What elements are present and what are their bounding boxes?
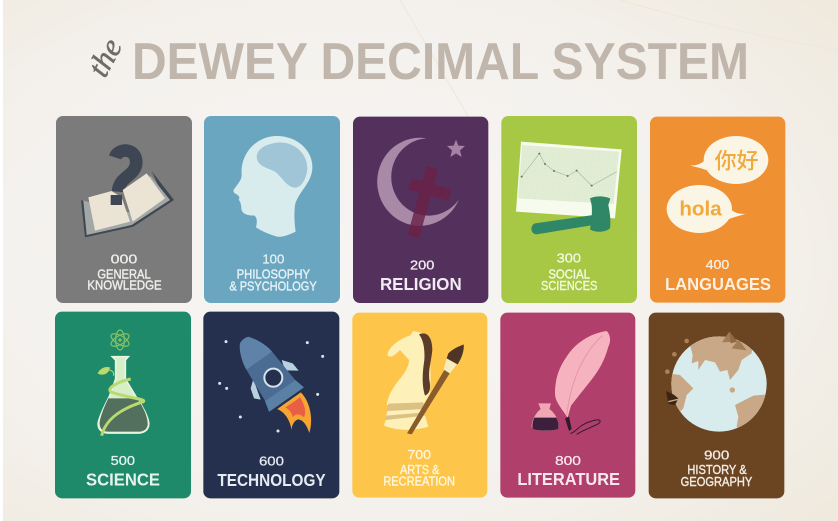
icon: chess knight and paintbrush [384, 331, 464, 434]
label: 500 science: SCIENCE [86, 470, 160, 490]
icon: head with brain [233, 136, 312, 237]
label: 000 general knowledge: 000 [111, 251, 137, 266]
icon: open book and question mark [81, 151, 174, 237]
label: 500 science [86, 453, 160, 490]
card: 500 science [55, 312, 191, 498]
icon: quill and inkwell [532, 331, 610, 434]
label: 600 technology: 600 [259, 454, 284, 469]
label: 100 philosophy and psychology: 100 [262, 251, 284, 266]
label: 300 social sciences [541, 251, 597, 293]
label: 100 philosophy and psychology: PHILOSOPHY [237, 268, 310, 282]
card: 200 religion [353, 117, 488, 303]
icon: flask with atom and vine [98, 330, 149, 436]
label: 900 history and geography [681, 447, 753, 489]
card: 100 philosophy and psychology [204, 116, 340, 303]
icon: speech bubble nihao [690, 136, 768, 184]
label: 200 religion: 200 [410, 257, 434, 272]
label: 100 philosophy and psychology: & PSYCHOLOGY [229, 279, 317, 293]
label: 000 general knowledge: GENERAL [97, 267, 151, 281]
card: 000 general knowledge [56, 116, 192, 303]
icon: speech bubble hola [667, 185, 746, 233]
label: 900 history and geography: 900 [704, 447, 729, 462]
label: 800 literature: 800 [555, 453, 581, 468]
label: 300 social sciences: SCIENCES [541, 279, 597, 293]
icon: speech bubble nihao: 你好 [715, 143, 759, 175]
label: 400 languages: LANGUAGES [665, 274, 771, 294]
label: 200 religion: RELIGION [380, 274, 462, 294]
label: 600 technology: TECHNOLOGY [217, 470, 326, 490]
card: 700 arts and recreation [352, 313, 487, 498]
label: 500 science: 500 [111, 453, 135, 468]
label: 800 literature [517, 453, 620, 489]
card: 800 literature [500, 313, 635, 498]
label: 400 languages: 400 [706, 257, 729, 272]
label: 000 general knowledge: KNOWLEDGE [87, 279, 162, 293]
title prefix: the: the [80, 32, 129, 82]
icon: globe with pyramids [665, 332, 773, 433]
label: 900 history and geography: GEOGRAPHY [681, 475, 753, 489]
label: 200 religion [380, 257, 462, 294]
icon: rocket with stars [218, 327, 324, 433]
card: 300 social sciences [501, 116, 637, 303]
icon: speech bubble hola: hola [679, 198, 723, 220]
card: 400 languages [650, 117, 785, 303]
title: DEWEY DECIMAL SYSTEM [132, 33, 749, 91]
card: 900 history and geography [649, 313, 784, 498]
label: 100 philosophy and psychology [229, 251, 317, 293]
label: 700 arts and recreation: 700 [407, 447, 431, 462]
icon: chart and gavel [516, 142, 622, 234]
label: 300 social sciences: 300 [557, 251, 581, 266]
label: 300 social sciences: SOCIAL [548, 267, 590, 281]
label: 800 literature: LITERATURE [517, 469, 620, 489]
label: 900 history and geography: HISTORY & [687, 463, 747, 477]
label: 400 languages [665, 257, 771, 294]
label: 700 arts and recreation [383, 447, 455, 488]
label: 700 arts and recreation: RECREATION [383, 474, 455, 488]
icon: crescent, cross and star [377, 138, 465, 237]
label: 600 technology [217, 454, 326, 490]
label: 700 arts and recreation: ARTS & [400, 463, 440, 477]
label: 000 general knowledge [87, 251, 162, 293]
card: 600 technology [203, 312, 339, 498]
